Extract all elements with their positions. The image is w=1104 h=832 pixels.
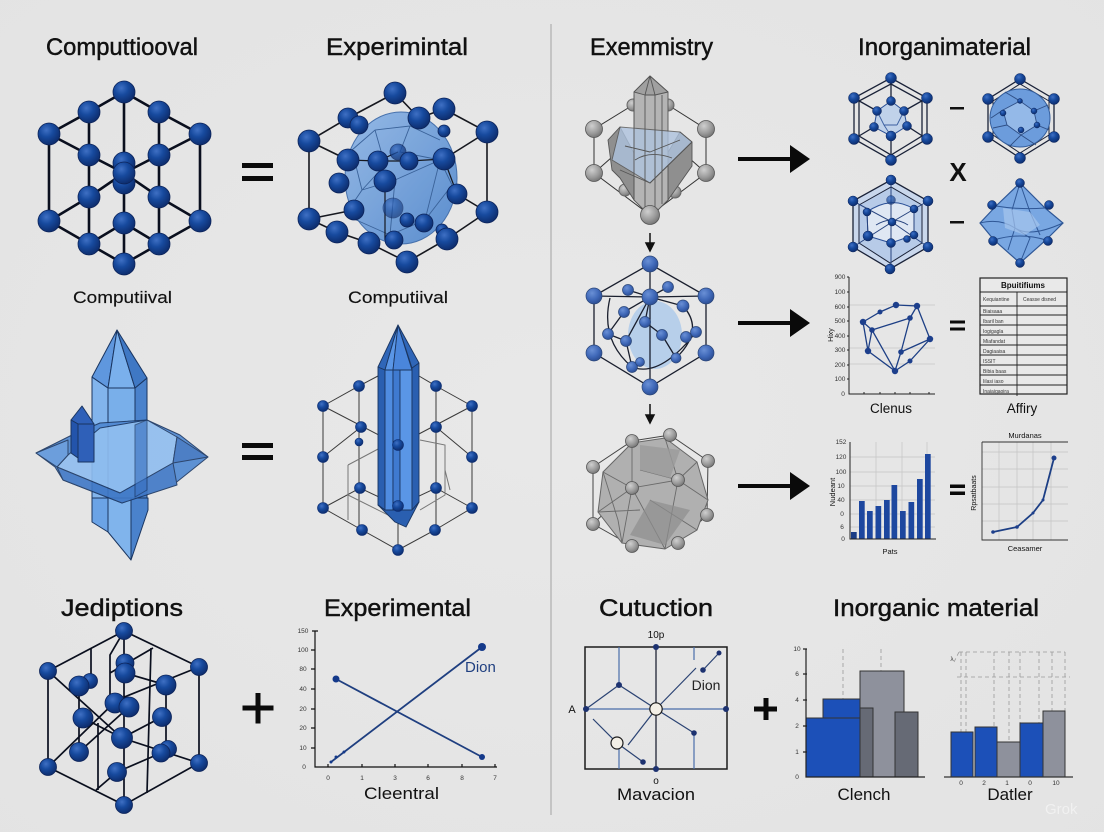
- bar chart: Pats: 0: [840, 511, 844, 518]
- data table: Affiry: ISSIT: [983, 359, 996, 365]
- icon: hexagonal cage A: [848, 72, 932, 166]
- plus sign, bottom left: [242, 693, 274, 724]
- bar chart: Pats: 40: [837, 497, 845, 504]
- line chart: Cleentral: 150: [298, 628, 309, 635]
- line chart: Cleentral: 20: [299, 725, 307, 732]
- icon: hexagonal cage B with sphere: [982, 74, 1060, 164]
- line chart: Cleentral: 7: [493, 775, 497, 782]
- bar chart: Clench: Clench: [838, 785, 890, 804]
- heading: Inorganic material: Inorganic material: [833, 595, 1039, 622]
- plus sign, bottom right: [754, 698, 777, 720]
- bar chart: Clench: 6: [795, 671, 799, 678]
- line chart: Cleentral: 6: [426, 775, 430, 782]
- data table: Affiry: Bibia baas: [983, 369, 1007, 375]
- bar chart: Pats: Pats: [882, 547, 898, 556]
- bar chart: Datler: 0: [1028, 780, 1032, 787]
- heading: Experimintal: Experimintal: [326, 34, 468, 61]
- bar chart: Datler: Datler: [987, 785, 1033, 804]
- data table: Affiry: Dagiaaisa: [983, 349, 1005, 355]
- data table: Affiry: Biaisaaa: [983, 309, 1002, 315]
- heading: Jediptions: Jediptions: [61, 595, 183, 622]
- icon: lattice, bottom left: [40, 622, 208, 814]
- bar chart: Pats: 100: [836, 469, 847, 476]
- data table: Affiry: Kequiantine: [983, 297, 1010, 303]
- network chart: Clenus: 0: [841, 391, 845, 398]
- data table: Affiry: Ibaril ban: [983, 319, 1004, 325]
- arrow: down 2: [646, 404, 654, 423]
- line chart: Murdanas: [971, 431, 1068, 553]
- label: Computiival left: Computiival: [73, 288, 172, 307]
- network chart: Clenus: 600: [835, 304, 846, 311]
- data table: Affiry: Bpuitifiums: [1001, 281, 1046, 290]
- data table: Affiry: [980, 278, 1067, 416]
- icon: crystal in lattice: [318, 325, 478, 556]
- network chart: Clenus: 900: [835, 274, 846, 281]
- network chart: Clenus: 100: [835, 376, 846, 383]
- equals sign, bar row: [950, 484, 965, 495]
- bar chart: Pats: Nudeant: [828, 477, 837, 506]
- bar chart: Pats: [828, 439, 936, 556]
- bar chart: Clench: 2: [795, 723, 799, 730]
- network square chart: Mavacion: Mavacion: [617, 785, 695, 804]
- bar chart: Pats: 120: [836, 454, 847, 461]
- bar chart: Datler: [944, 652, 1073, 804]
- minus sign C: [950, 221, 964, 224]
- line chart: Cleentral: [298, 628, 497, 803]
- line chart: Cleentral: 100: [298, 647, 309, 654]
- heading: Cutuction: Cutuction: [599, 595, 713, 622]
- network chart: Clenus: 200: [835, 362, 846, 369]
- line chart: Cleentral: Dion: [465, 659, 496, 676]
- heading: Exemmistry: Exemmistry: [590, 34, 713, 61]
- data table: Affiry: Affiry: [1007, 401, 1037, 416]
- bar chart: Datler: λ: [950, 656, 954, 663]
- network chart: Clenus: 100: [835, 289, 846, 296]
- line chart: Cleentral: 0: [302, 764, 306, 771]
- network square chart: Mavacion: [568, 630, 729, 804]
- watermark: Grok: Grok: [1045, 801, 1078, 818]
- bar chart: Pats: 152: [836, 439, 847, 446]
- line chart: Murdanas: Ceasamer: [1008, 544, 1043, 553]
- bar chart: Datler: 1: [1005, 780, 1009, 787]
- data table: Affiry: Iogigagla: [983, 329, 1004, 335]
- network chart: Clenus: 500: [835, 318, 846, 325]
- network square chart: Mavacion: Dion: [692, 677, 720, 693]
- line chart: Cleentral: 0: [326, 775, 330, 782]
- icon: blue faceted diamond: [980, 178, 1063, 268]
- network square chart: Mavacion: 10p: [648, 630, 665, 641]
- line chart: Cleentral: 40: [299, 686, 307, 693]
- line chart: Cleentral: 80: [299, 666, 307, 673]
- line chart: Cleentral: 1: [360, 775, 364, 782]
- line chart: Murdanas: Murdanas: [1008, 431, 1042, 440]
- network chart: Clenus: Clenus: [870, 401, 912, 416]
- heading: Inorganimaterial: Inorganimaterial: [858, 34, 1031, 61]
- heading: Experimental: Experimental: [324, 595, 471, 622]
- network chart: Clenus: 300: [835, 347, 846, 354]
- bar chart: Datler: 2: [982, 780, 986, 787]
- icon: hexagonal cage C: [848, 175, 933, 274]
- line chart: Cleentral: 10: [299, 745, 307, 752]
- icon: grey crystal in lattice: [586, 76, 714, 224]
- network chart: Clenus: 400: [835, 333, 846, 340]
- arrow: down 1: [646, 233, 654, 251]
- heading: Computtiooval: Computtiooval: [46, 34, 198, 61]
- data table: Affiry: Ceasse disned: [1023, 297, 1056, 303]
- equals sign, middle left: [242, 443, 273, 460]
- arrow: right 3: [738, 472, 810, 500]
- bar chart: Datler: 0: [959, 780, 963, 787]
- equals sign, clenus row: [950, 320, 965, 330]
- icon: lattice structure, top left: [38, 81, 211, 275]
- bar chart: Clench: 10: [793, 646, 801, 653]
- bar chart: Clench: 4: [795, 697, 799, 704]
- bar chart: Clench: [793, 646, 925, 804]
- data table: Affiry: Miafandat: [983, 339, 1006, 345]
- data table: Affiry: Iilasi iaso: [983, 379, 1004, 385]
- icon: blue-node lattice with pale sphere: [586, 256, 714, 395]
- icon: lattice with blue sphere: [298, 82, 498, 273]
- bar chart: Clench: 1: [795, 749, 799, 756]
- multiplication sign: X: [949, 157, 967, 187]
- line chart: Cleentral: 20: [299, 706, 307, 713]
- line chart: Cleentral: 3: [393, 775, 397, 782]
- label: Computiival right: Computiival: [348, 288, 448, 307]
- network chart: Clenus: Hixy: [828, 328, 835, 342]
- line chart: Murdanas: Rpsatbaats: [971, 475, 978, 511]
- bar chart: Pats: 0: [841, 536, 845, 543]
- arrow: right 2: [738, 309, 810, 337]
- icon: blue crystal with plate: [36, 330, 208, 560]
- network chart: Clenus: [828, 274, 935, 416]
- icon: grey polyhedron sphere: [586, 428, 714, 552]
- bar chart: Datler: 10: [1052, 780, 1060, 787]
- arrow: right 1: [738, 145, 810, 173]
- bar chart: Pats: 10: [837, 483, 845, 490]
- bar chart: Pats: 6: [840, 524, 844, 531]
- equals sign, top left: [242, 163, 273, 181]
- network square chart: Mavacion: A: [568, 704, 576, 716]
- minus sign A: [950, 107, 964, 110]
- line chart: Cleentral: 8: [460, 775, 464, 782]
- line chart: Cleentral: Cleentral: [364, 784, 439, 803]
- bar chart: Clench: 0: [795, 774, 799, 781]
- data table: Affiry: Inaiaigaoira: [983, 389, 1009, 395]
- network square chart: Mavacion: o: [653, 776, 659, 787]
